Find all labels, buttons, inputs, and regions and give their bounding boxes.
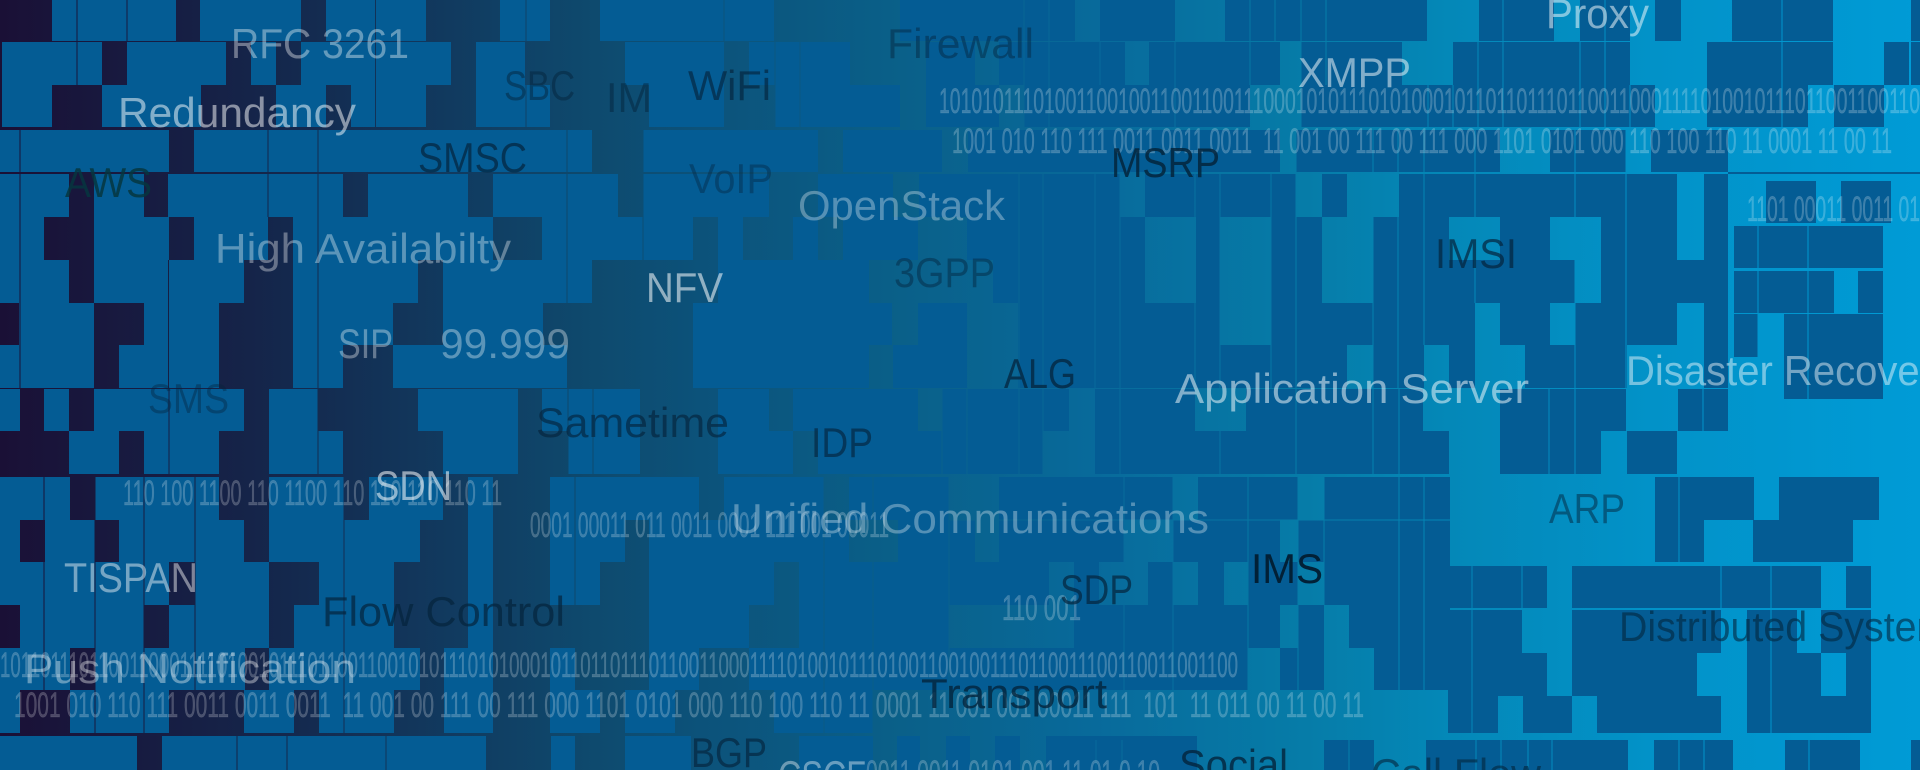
word: IM: IM [606,74,652,121]
word: RFC 3261: RFC 3261 [231,20,409,67]
word: OpenStack: OpenStack [798,182,1006,229]
word: Push Notification: Push Notification [24,645,356,692]
word: TISPAN: TISPAN [64,554,198,601]
word: High Availabilty: High Availabilty [215,225,511,272]
word: MSRP: MSRP [1111,139,1220,186]
word: SBC: SBC [504,62,575,109]
binary strip 6: 110 001 [1002,589,1081,628]
word: SIP: SIP [338,320,393,367]
word: NFV: NFV [646,264,723,311]
word: Unified Communications: Unified Communications [731,495,1209,542]
word: SDN: SDN [375,462,452,509]
word: Firewall: Firewall [887,20,1034,67]
word: Redundancy: Redundancy [118,89,356,136]
word: 3GPP: 3GPP [894,249,995,296]
binary strip 4: 110 100 1100 110 1100 110 110 110 110 11 [123,474,502,513]
tile blocks at right [1734,181,1891,399]
word: SMSC: SMSC [418,134,527,181]
word: SDP: SDP [1060,566,1133,613]
word: Transport: Transport [921,670,1107,717]
word: IMSI: IMSI [1435,230,1517,277]
word: ALG: ALG [1004,350,1076,397]
word: AWS: AWS [65,159,152,206]
binary strip 5: 0001 00011 011 0011 0001 111 001 00011 [530,506,889,545]
word: WiFi: WiFi [688,62,771,109]
word: Flow Control: Flow Control [322,588,565,635]
word: IMS: IMS [1251,545,1323,592]
word: IDP: IDP [811,419,873,466]
word: XMPP: XMPP [1298,49,1411,96]
word: Sametime: Sametime [536,399,729,446]
word: 99.999: 99.999 [440,320,570,367]
word: Application Server: Application Server [1175,365,1529,412]
word: ARP: ARP [1549,485,1625,532]
word: SMS: SMS [148,375,229,422]
word: VoIP: VoIP [689,155,773,202]
